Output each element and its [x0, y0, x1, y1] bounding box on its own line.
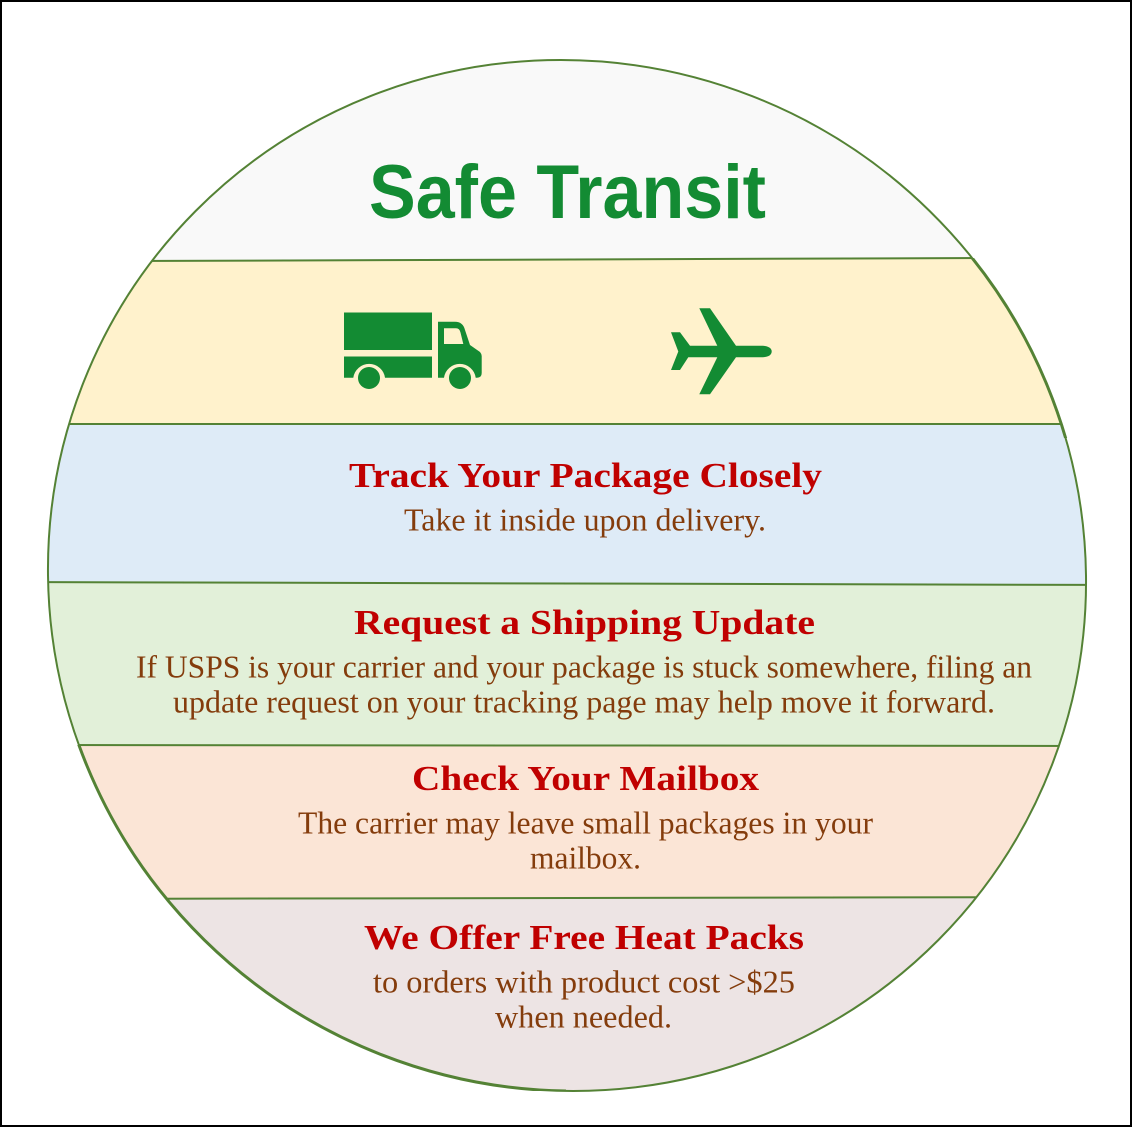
text block: shipping update: If USPS is your carrier and your package is stuck somewhere, filing an — [136, 648, 1032, 684]
title: Safe Transit — [369, 150, 766, 235]
text block: shipping update: Request a Shipping Update — [354, 603, 815, 642]
band: track package — [0, 424, 1132, 585]
text block: heat packs: when needed. — [495, 998, 672, 1034]
band: title — [0, 0, 1132, 262]
text block: heat packs: to orders with product cost >$25 — [373, 964, 795, 1000]
icon: airplane — [671, 308, 772, 394]
text block: mailbox: The carrier may leave small packages in your — [298, 804, 873, 840]
band: shipping update — [0, 582, 1132, 746]
text block: heat packs — [364, 918, 804, 1034]
text block: track package — [349, 456, 823, 538]
icon: truck — [344, 312, 482, 389]
band: transport icons — [70, 259, 1060, 423]
band: heat packs — [170, 898, 974, 1090]
circle of colored bands — [49, 257, 1085, 1090]
text block: shipping update — [136, 603, 1032, 720]
text block: mailbox: Check Your Mailbox — [412, 759, 760, 798]
band: mailbox — [81, 746, 1058, 898]
text block: shipping update: update request on your tracking page may help move it forward. — [173, 684, 995, 720]
text block: heat packs: We Offer Free Heat Packs — [364, 918, 804, 957]
text block: track package: Take it inside upon delivery. — [404, 502, 766, 538]
text block: track package: Track Your Package Closely — [349, 456, 823, 495]
text block: mailbox: mailbox. — [530, 840, 641, 876]
text block: mailbox — [298, 759, 873, 876]
